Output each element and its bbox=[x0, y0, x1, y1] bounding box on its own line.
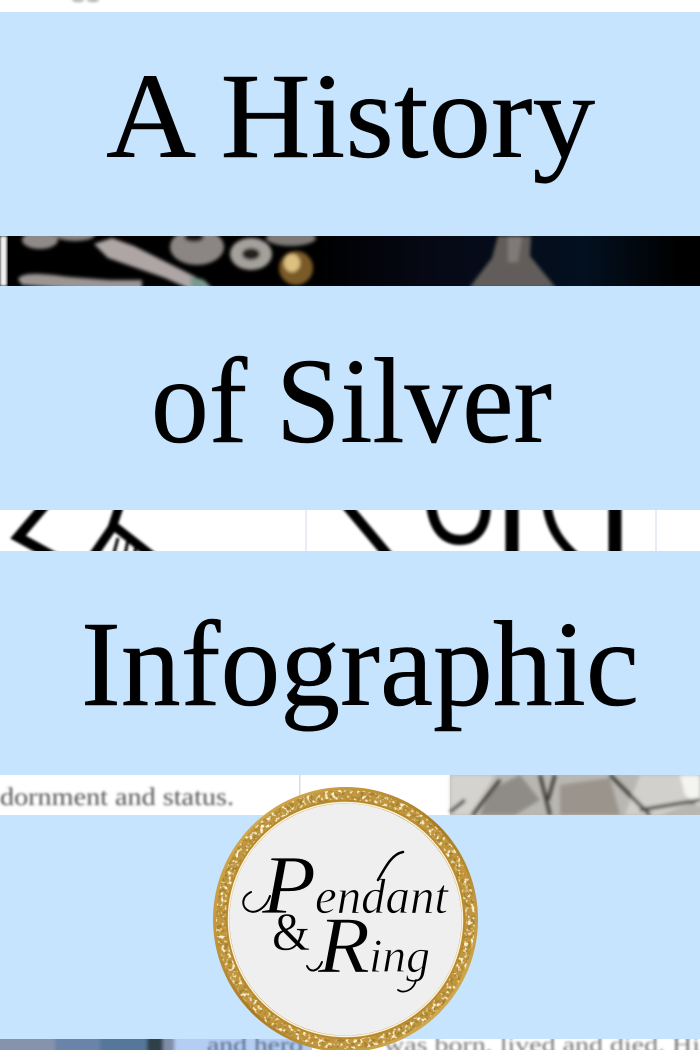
stone photo bbox=[450, 775, 700, 815]
photo strip: silver artefacts bbox=[0, 236, 700, 286]
title line 2: of Silver bbox=[151, 334, 552, 469]
logo wordmark: endant bbox=[315, 868, 449, 924]
blue band 2 bbox=[0, 286, 700, 510]
logo wordmark bbox=[261, 839, 449, 990]
logo wordmark: R bbox=[317, 902, 370, 990]
logo wordmark: & bbox=[272, 902, 310, 962]
logo: Pendant & Ring badge bbox=[213, 787, 478, 1050]
logo wordmark: ing bbox=[369, 930, 430, 983]
top sliver of background photo bbox=[72, 0, 99, 2]
blurred caption text: dornment and status. bbox=[0, 784, 234, 811]
gold rim bbox=[213, 787, 478, 1050]
title line 3: Infographic bbox=[81, 597, 639, 732]
strip: enlarged black lettering bbox=[8, 510, 657, 551]
strip: bottom blurred photo and text bbox=[0, 1039, 700, 1050]
title line 1: A History bbox=[106, 49, 595, 184]
blue band 3 bbox=[0, 551, 700, 775]
logo wordmark: P bbox=[261, 839, 316, 932]
blue band 1 bbox=[0, 12, 700, 236]
strip: blurred caption and stone photo bbox=[0, 775, 700, 815]
blue band 4 bbox=[0, 815, 700, 1039]
logo calligraphic flourishes bbox=[243, 852, 416, 992]
badge face bbox=[230, 804, 462, 1036]
